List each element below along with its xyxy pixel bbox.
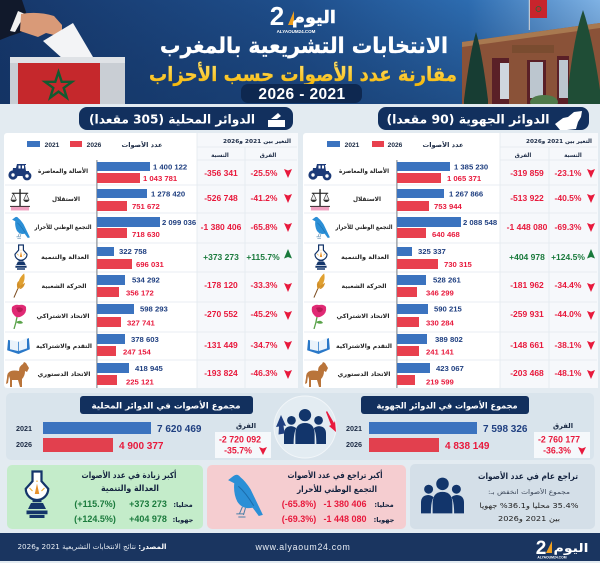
subtitle: مقارنة عدد الأصوات حسب الأحزاب <box>149 61 457 86</box>
row: العدالة والتنمية: +124.5% <box>551 252 585 262</box>
row: العدالة والتنمية: 325 337 <box>418 247 446 256</box>
row: العدالة والتنمية <box>315 245 595 270</box>
source: المصدر: نتائج الانتخابات التشريعية 2021 و2026 <box>17 542 167 551</box>
heading: local districts <box>79 107 293 130</box>
panel: biggest decline: أكبر تراجع في عدد الأصوات <box>288 469 383 481</box>
year pill <box>241 84 362 103</box>
totals heading: regional: مجموع الأصوات في الدوائر الجهوية <box>376 400 518 412</box>
title: الانتخابات التشريعية بالمغرب <box>160 34 448 59</box>
footer logo: اليوم <box>554 541 588 556</box>
parliament building, trees and flag <box>462 0 600 109</box>
local totals bars: 7 620 469 <box>157 424 202 435</box>
row: الاستقلال: -41.2% <box>251 193 278 203</box>
row: الحركة الشعبية: 346 299 <box>426 288 454 298</box>
row: الاستقلال: -526 748 <box>204 193 238 203</box>
row: الاتحاد الدستوري: -193 824 <box>204 368 238 378</box>
row: الأصالة والمعاصرة: -319 859 <box>510 168 544 178</box>
row: التقدم والاشتراكية <box>7 334 292 356</box>
footer logo: 2 <box>536 538 546 559</box>
ballot box with hand <box>0 0 125 104</box>
row: الاتحاد الدستوري: -46.3% <box>251 368 278 378</box>
row: الاستقلال <box>310 189 595 211</box>
row: الاتحاد الدستوري: 423 067 <box>436 364 464 373</box>
legend: عدد الأصوات <box>122 141 162 149</box>
row: التجمع الوطني للأحرار: التجمع الوطني للأحرار <box>335 223 392 231</box>
row: الأصالة والمعاصرة <box>308 162 595 183</box>
panel: biggest increase: أكبر زيادة في عدد الأصوات <box>82 469 177 481</box>
row: التجمع الوطني للأحرار: -65.8% <box>251 222 278 232</box>
panel: overall decline: 35.4% محليا و36.1% جهويا <box>479 501 579 510</box>
row: العدالة والتنمية: العدالة والتنمية <box>41 254 89 261</box>
row: الحركة الشعبية: 534 292 <box>132 276 160 284</box>
row: الاتحاد الدستوري <box>6 362 292 387</box>
row: الأصالة والمعاصرة: 1 385 230 <box>454 162 488 172</box>
panel: biggest increase: محليا: <box>173 501 193 509</box>
legend: 2026 <box>87 142 102 149</box>
row: العدالة والتنمية: +115.7% <box>246 252 280 262</box>
row: الاتحاد الاشتراكي: 598 293 <box>140 304 168 314</box>
row: التجمع الوطني للأحرار: -1 448 080 <box>507 222 548 232</box>
row: الأصالة والمعاصرة: 1 400 122 <box>153 162 187 172</box>
row: الاستقلال: الاستقلال <box>52 196 80 203</box>
row: الأصالة والمعاصرة: -23.1% <box>555 168 582 178</box>
row: الاتحاد الدستوري: 418 945 <box>135 364 164 373</box>
row: التجمع الوطني للأحرار: 2 088 548 <box>463 218 498 227</box>
row: الحركة الشعبية: -33.3% <box>251 280 278 290</box>
row: الاستقلال: 1 267 866 <box>449 190 483 198</box>
row: الاستقلال: 1 278 420 <box>151 190 185 198</box>
panel: overall decline: مجموع الأصوات انخفض بـ: <box>488 488 570 496</box>
row: الاتحاد الاشتراكي <box>12 304 292 329</box>
row: التجمع الوطني للأحرار <box>312 217 595 239</box>
panel: biggest decline: -1 380 406 <box>323 499 367 509</box>
row: الاتحاد الدستوري: -48.1% <box>555 368 582 378</box>
totals heading: local: مجموع الأصوات في الدوائر المحلية <box>92 400 240 412</box>
change header: التغير بين 2021 و2026 <box>223 139 291 145</box>
row: التجمع الوطني للأحرار <box>12 217 292 239</box>
regional totals bars: 4 838 149 <box>445 441 490 452</box>
change header: الفرق <box>515 153 531 159</box>
regional difference box <box>534 422 590 458</box>
row: العدالة والتنمية: 730 315 <box>444 260 473 269</box>
row: الاتحاد الاشتراكي: 327 741 <box>127 318 156 328</box>
header background <box>0 0 600 104</box>
icon: people <box>421 478 464 513</box>
row: العدالة والتنمية: 322 758 <box>119 247 148 256</box>
row: التقدم والاشتراكية: -34.7% <box>251 340 278 350</box>
row: الاتحاد الاشتراكي: 590 215 <box>434 304 463 314</box>
panel: overall decline: بين 2021 و2026 <box>498 514 560 523</box>
change header: النسبة <box>211 153 229 159</box>
row: الحركة الشعبية: -178 120 <box>204 280 238 290</box>
row: الاتحاد الدستوري: الاتحاد الدستوري <box>38 371 90 378</box>
icon: lantern <box>26 472 48 518</box>
row: الاتحاد الاشتراكي: -45.2% <box>251 309 278 319</box>
row: التجمع الوطني للأحرار: -1 380 406 <box>201 222 242 232</box>
row: الأصالة والمعاصرة: -356 341 <box>204 168 238 178</box>
panel: biggest decline: (-65.8%) <box>282 499 316 509</box>
change header <box>211 139 291 159</box>
panel: biggest increase: (+124.5%) <box>74 514 116 524</box>
row: العدالة والتنمية: +404 978 <box>509 252 545 262</box>
totals heading: local <box>80 396 253 414</box>
row: الاتحاد الاشتراكي: -44.0% <box>555 309 582 319</box>
row: الحركة الشعبية <box>14 273 292 298</box>
regional difference box: -36.3% <box>543 446 571 456</box>
row: الاتحاد الاشتراكي <box>312 304 595 329</box>
heading: local districts: الدوائر المحلية (305 مقعدا) <box>89 112 255 126</box>
regional totals bars <box>346 422 528 452</box>
panel: biggest decline: (-69.3%) <box>282 514 316 524</box>
row: الحركة الشعبية: 356 172 <box>126 288 154 298</box>
row: التقدم والاشتراكية: 247 154 <box>123 348 152 356</box>
row: التقدم والاشتراكية: -38.1% <box>555 340 582 350</box>
logo: اليوم <box>292 8 336 28</box>
legend <box>27 141 162 149</box>
local totals bars <box>16 422 202 452</box>
panel: biggest decline: جهويا: <box>374 516 395 524</box>
logo: ALYAOUM24.COM <box>277 29 316 34</box>
row: التقدم والاشتراكية <box>307 334 595 356</box>
panel: biggest increase: جهويا: <box>173 516 194 524</box>
panel: local districts table <box>4 133 298 388</box>
row: العدالة والتنمية: +373 273 <box>203 252 239 262</box>
local totals bars: 2026 <box>16 440 32 449</box>
row: الاتحاد الدستوري <box>305 362 595 387</box>
row: العدالة والتنمية: العدالة والتنمية <box>341 254 389 261</box>
row: الأصالة والمعاصرة: 1 065 371 <box>447 174 482 183</box>
row: التجمع الوطني للأحرار: 640 468 <box>432 230 461 239</box>
row: الاستقلال: 753 944 <box>434 202 463 211</box>
regional difference box: -2 760 177 <box>538 434 580 444</box>
row: الحركة الشعبية: 528 261 <box>433 276 462 284</box>
row: التقدم والاشتراكية: -148 661 <box>510 340 544 350</box>
local totals bars: 2021 <box>16 424 32 433</box>
local difference box: الفرق <box>236 422 256 430</box>
panel: regional districts table <box>303 133 598 388</box>
panel: biggest decline: محليا: <box>374 501 394 509</box>
footer <box>0 533 600 561</box>
row: التقدم والاشتراكية: 241 141 <box>426 348 455 356</box>
row: الحركة الشعبية: الحركة الشعبية <box>42 283 86 290</box>
row: التقدم والاشتراكية: التقدم والاشتراكية <box>36 343 92 350</box>
panel: biggest decline <box>207 465 406 529</box>
local totals bars: 4 900 377 <box>119 441 164 452</box>
row: الاستقلال <box>10 189 292 211</box>
row: التجمع الوطني للأحرار: التجمع الوطني للأحرار <box>34 223 92 231</box>
heading: regional districts: الدوائر الجهوية (90 مقعدا) <box>386 112 550 126</box>
local difference box <box>215 422 271 458</box>
totals heading: regional <box>361 396 529 414</box>
panel: overall decline: تراجع عام في عدد الأصوات <box>478 471 578 482</box>
legend: 2021 <box>45 142 60 149</box>
regional totals bars: 2021 <box>346 424 362 433</box>
row: الحركة الشعبية: -34.4% <box>555 280 582 290</box>
row: الأصالة والمعاصرة: الأصالة والمعاصرة <box>38 167 88 175</box>
row: العدالة والتنمية: 696 031 <box>136 260 165 269</box>
change header: النسبة <box>564 153 582 159</box>
row: الاتحاد الاشتراكي: -270 552 <box>204 309 238 319</box>
panel: biggest increase: +373 273 <box>129 499 167 509</box>
row: التقدم والاشتراكية: التقدم والاشتراكية <box>336 343 392 350</box>
row: التجمع الوطني للأحرار: -69.3% <box>555 222 582 232</box>
row: الأصالة والمعاصرة: الأصالة والمعاصرة <box>339 167 389 175</box>
row: الاتحاد الدستوري: 225 121 <box>126 378 155 386</box>
panel: biggest increase: +404 978 <box>129 514 167 524</box>
row: الاتحاد الاشتراكي: 330 284 <box>426 318 455 328</box>
row: الاستقلال: -40.5% <box>555 193 582 203</box>
panel: biggest increase <box>7 465 203 529</box>
center people icon with arrows <box>274 396 336 458</box>
regional totals bars: 7 598 326 <box>483 424 528 435</box>
row: الاتحاد الاشتراكي: -259 931 <box>510 309 544 319</box>
panel: biggest decline: التجمع الوطني للأحرار <box>296 484 377 495</box>
legend: 2026 <box>388 142 403 149</box>
local difference box: -35.7% <box>224 446 252 456</box>
row: الاتحاد الاشتراكي: الاتحاد الاشتراكي <box>36 313 90 320</box>
local difference box: -2 720 092 <box>219 434 261 444</box>
footer logo: ALYAOUM24.COM <box>537 556 567 560</box>
row: الاستقلال: -513 922 <box>510 193 544 203</box>
row: التجمع الوطني للأحرار: 2 099 036 <box>162 218 196 227</box>
row: التقدم والاشتراكية: -131 449 <box>204 340 238 350</box>
panel: biggest decline: -1 448 080 <box>323 514 367 524</box>
logo: 2 <box>270 1 284 31</box>
row: الحركة الشعبية: -181 962 <box>510 280 544 290</box>
icon: dove <box>228 475 263 517</box>
logo <box>270 1 336 34</box>
row: الأصالة والمعاصرة: 1 043 781 <box>143 174 178 183</box>
legend <box>327 141 464 149</box>
heading: regional districts <box>378 107 589 130</box>
change header: الفرق <box>260 153 276 159</box>
row: الاتحاد الدستوري: -203 468 <box>510 368 544 378</box>
change header <box>515 139 592 159</box>
change header: التغير بين 2021 و2026 <box>526 139 592 145</box>
panel: biggest increase: (+115.7%) <box>74 499 116 509</box>
row: التقدم والاشتراكية: 389 802 <box>435 335 463 344</box>
panel: totals <box>6 393 594 460</box>
regional difference box: الفرق <box>553 422 573 430</box>
row: الأصالة والمعاصرة: -25.5% <box>251 168 278 178</box>
row: التجمع الوطني للأحرار: 718 630 <box>132 230 160 239</box>
year pill: 2026 - 2021 <box>258 86 346 103</box>
row: الاتحاد الدستوري: الاتحاد الدستوري <box>338 371 390 378</box>
row: الاتحاد الاشتراكي: الاتحاد الاشتراكي <box>336 313 390 320</box>
row: الحركة الشعبية <box>314 273 595 298</box>
regional totals bars: 2026 <box>346 440 362 449</box>
panel: biggest increase: العدالة والتنمية <box>101 483 159 494</box>
row: الاتحاد الدستوري: 219 599 <box>426 378 454 386</box>
row: الحركة الشعبية: الحركة الشعبية <box>342 283 386 290</box>
website: www.alyaoum24.com <box>254 542 351 552</box>
legend: عدد الأصوات <box>422 141 464 149</box>
footer logo <box>536 538 588 560</box>
row: الاستقلال: الاستقلال <box>353 196 381 203</box>
legend: 2021 <box>345 142 360 149</box>
row: التقدم والاشتراكية: 378 603 <box>131 335 159 344</box>
row: الاستقلال: 751 672 <box>132 202 160 211</box>
panel: overall decline <box>410 464 595 529</box>
row: العدالة والتنمية <box>15 245 292 270</box>
row: الأصالة والمعاصرة <box>8 162 292 183</box>
